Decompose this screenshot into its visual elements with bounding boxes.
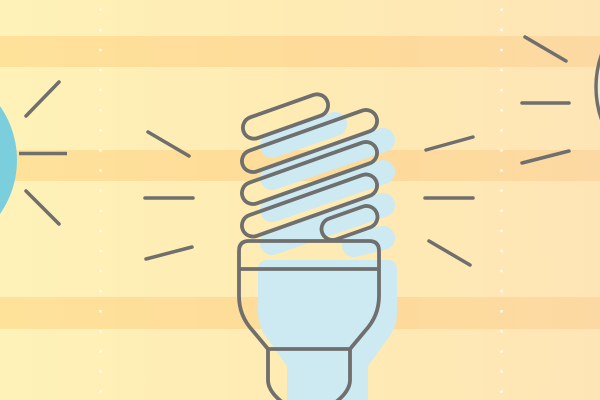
- central bulb: [239, 91, 397, 400]
- central bulb rays: left: [145, 132, 193, 259]
- blue offset fill: coil: [272, 124, 383, 245]
- central bulb rays: right: [425, 137, 473, 265]
- left bulb: blue circle: [0, 66, 17, 254]
- base outline: [239, 241, 379, 400]
- left bulb rays: [19, 82, 67, 224]
- right bulb: outline circle: [596, 0, 600, 186]
- horizontal bands: [0, 36, 600, 329]
- dotted vertical guides: [100, 0, 502, 400]
- blue offset fill: base: [258, 260, 397, 400]
- right bulb rays: [522, 37, 569, 163]
- coil outlines: [239, 91, 381, 243]
